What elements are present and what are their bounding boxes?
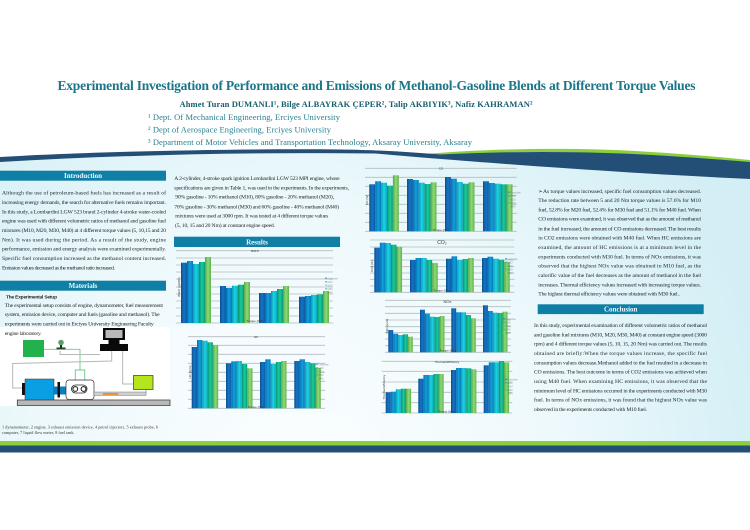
chart: CO: CO: [439, 166, 444, 170]
legend: M40: [508, 391, 513, 395]
text: engine specification: mixtures were used at 3000 rpm. It was tested at 4 different torque values: [175, 213, 329, 220]
legend: M30: [506, 327, 511, 331]
caption: diagram key: [2, 424, 158, 436]
chart: thermal efficiency: Thermal Efficiency: [382, 374, 386, 399]
icon: dynamometer: [22, 379, 66, 400]
text: discussion of results: The reduction rate between 5 and 20 Nm torque values is 57.6% for M10: [538, 197, 701, 204]
text: introduction: In this study, a Lombardini LGW 523 brand 2-cylinder 4-stroke water-cooled: [2, 209, 166, 215]
text: materials: The experimental setup consists of engine, dynamometer, fuel measurement: [5, 302, 163, 309]
legend: M20: [318, 369, 324, 373]
icon: flow meter: [56, 340, 66, 350]
text: engine specification: 70% gasoline - 30% methanol (M30) and 60% gasoline - 40% methanol (M40): [174, 203, 339, 210]
text: introduction: [2, 190, 167, 271]
legend: Gasoline: [508, 257, 518, 261]
legend: M40: [508, 271, 513, 275]
title: Experimental Investigation of Performance and Emissions of Methanol-Gasoline Blends at Different Torque Values: [58, 78, 696, 93]
heading: materials: Materials: [69, 282, 98, 290]
text: materials: experiments were carried out in Erciyes University Engineering Faculty: [5, 322, 154, 328]
heading: introduction: [0, 171, 166, 181]
legend: [505, 257, 518, 275]
legend: M30: [318, 373, 324, 377]
chart: CO: [365, 166, 521, 232]
text: discussion of results: experiments conducted with M30 fuel. In terms of NOx emissions, it was: [538, 253, 702, 260]
legend: M10: [318, 366, 324, 370]
heading: conclusion: [538, 304, 704, 314]
connection lines: [13, 349, 146, 394]
panel: materials: [0, 281, 170, 436]
text: introduction: Nm). It was used during the period. As a result of the study, engine: [2, 236, 166, 243]
affiliations: [148, 112, 473, 147]
text: engine specification: specifications are given in Table 1, was used in the experiments. In the experiments,: [174, 185, 350, 192]
text: introduction: performance, emission and energy analysis were examined experimentally.: [2, 246, 167, 253]
text: conclusion: using M40 fuel. When examining HC emissions, it was observed that the: [534, 378, 707, 385]
chart: NOx: [385, 299, 516, 352]
legend: M10: [508, 381, 513, 385]
chart: CO: Torque (Nm): [433, 228, 449, 232]
icon: test bench: [17, 400, 170, 406]
affiliations: ¹ Dept. Of Mechanical Engineering, Erciyes University: [148, 112, 341, 122]
legend: [503, 317, 516, 335]
chart: NOx: NOx: [444, 299, 452, 304]
text: discussion of results: observed that the highest NOx value was obtained in M10 fuel, as the: [538, 263, 701, 270]
legend: M20: [328, 283, 333, 287]
diagram: experimental setup: [0, 327, 170, 406]
text: materials: system, emission device, computer and fuels (gasoline and methanol). The: [5, 311, 160, 318]
text: engine specification: 90% gasoline - 10% methanol (M10), 80% gasoline - 20% methanol (M20),: [175, 194, 335, 201]
text: introduction: mixtures (M10, M20, M30, M40) at 4 different torque values (5, 10,15 and 20: [2, 227, 166, 234]
icon: computer: [100, 328, 128, 351]
chart: BSFC: [176, 249, 338, 323]
icon: exhaust pipe: [94, 392, 146, 396]
chart: thermal efficiency: [382, 360, 518, 414]
text: introduction: Emission values decreased as the methanol ratio increased.: [2, 265, 116, 271]
legend: M10: [510, 194, 516, 198]
legend: Gasoline: [318, 362, 329, 366]
wave: navy band: [0, 149, 750, 179]
legend: M30: [328, 287, 333, 291]
chart: BSFC: Torque (Nm): [247, 319, 263, 323]
legend: M20: [508, 264, 513, 268]
text: conclusion: obtained are briefly:When the torque values increase, the specific fuel: [534, 350, 707, 357]
legend: M30: [508, 267, 513, 271]
text: conclusion: fuel. In terms of NOx emissions, it was found that the highest NOx value was: [534, 397, 708, 404]
chart: thermal efficiency: Thermal Efficiency: [435, 360, 460, 364]
text: conclusion: consumption values decrease.Methanol added to the fuel resulted in a decrease in: [534, 359, 707, 366]
legend: [325, 276, 338, 294]
chart: CO2: CO2 (%): [370, 260, 374, 272]
text: discussion of results: examined, the amount of HC emissions is at a minimum level in the: [538, 244, 701, 251]
text: engine specification: (5, 10, 15 and 20 Nm) at constant engine speed.: [175, 222, 276, 229]
text: discussion of results: in the fuel increased, the amount of CO emissions decreased. The best results: [538, 225, 702, 232]
chart: CO: CO (%): [365, 195, 369, 205]
icon: fuel tank: [23, 340, 44, 357]
text: engine specification: A 2-cylinder, 4-stroke spark ignition Lombardini LGW 523 MPI engine, whose: [174, 176, 340, 182]
legend: Gasoline: [510, 190, 521, 194]
caption: diagram key: computer, 7 liquid flow meter, 8 fuel tank.: [2, 430, 75, 436]
text: conclusion: observed in the experiments conducted with M10 fuel.: [534, 406, 648, 413]
text: conclusion: and gasoline fuel mixtures (M10, M20, M30, M40) at constant engine speed (3000: [534, 331, 707, 338]
legend: Gasoline: [328, 276, 338, 280]
legend: [508, 190, 521, 208]
panel: introduction: [0, 171, 167, 271]
legend: M40: [510, 204, 516, 208]
text: introduction: Specific fuel consumption increased as the methanol content increased.: [2, 255, 167, 262]
heading: results: Results: [246, 238, 268, 246]
text: conclusion: [534, 322, 708, 413]
heading: materials: [0, 281, 166, 291]
text: conclusion: In this study, experimental examination of different volumetric ratios of methanol: [534, 322, 707, 329]
text: discussion of results: CO emissions were examined, it was observed that as the amount of methanol: [538, 216, 701, 223]
authors: Ahmet Turan DUMANLI¹, Bilge ALBAYRAK ÇEPER², Talip AKBIYIK³, Nafiz KAHRAMAN²: [180, 99, 533, 109]
subheading: experimental setup: The Experimental Setup: [6, 294, 57, 300]
footer band: [0, 441, 750, 452]
legend: M40: [328, 290, 333, 294]
heading: results: [174, 237, 340, 247]
legend: [505, 377, 518, 395]
text: discussion of results: [538, 188, 702, 298]
text: conclusion: CO emissions. The best outcome in terms of CO2 emissions was achieved when: [534, 369, 707, 376]
text: discussion of results: in CO2 emissions were obtained with M40 fuel. When HC emissions are: [538, 235, 701, 242]
heading: introduction: Introduction: [64, 172, 102, 180]
chart: HC: [188, 335, 329, 409]
legend: M40: [318, 376, 324, 380]
legend: M10: [328, 280, 333, 284]
chart: CO2: Torque (Nm): [434, 288, 450, 292]
legend: M10: [506, 320, 511, 324]
legend: M10: [508, 260, 513, 264]
legend: M20: [510, 197, 516, 201]
text: materials: engine laboratory.: [5, 331, 42, 337]
text: introduction: engine was used with different volumetric ratios of methanol and gasoline fuel: [2, 218, 166, 225]
affiliations: ² Dept of Aerospace Engineering, Erciyes University: [148, 124, 332, 134]
legend: Gasoline: [508, 377, 518, 381]
icon: emission device: [134, 376, 153, 390]
text: discussion of results: fuel, 52.8% for M20 fuel, 52.4% for M30 fuel and 51.1% for M40 fuel. When: [538, 206, 701, 213]
legend: M30: [510, 201, 516, 205]
icon: engine: [66, 380, 94, 400]
text: introduction: increasing energy demands, the search for alternative fuels remains important.: [2, 199, 167, 206]
text: materials: [5, 302, 163, 337]
text: introduction: Although the use of petroleum-based fuels has increased as a result of: [2, 190, 166, 196]
chart: CO2: CO₂: [437, 240, 447, 246]
text: conclusion: minimum level of HC emissions occurred in the experiments conducted with M30: [534, 387, 707, 394]
text: discussion of results: The highest thermal efficiency values were obtained with M30 fuel..: [538, 291, 681, 298]
chart: NOx: Torque (Nm): [440, 348, 456, 352]
text: discussion of results: ➢As torque values increased, specific fuel consumption values decreased.: [538, 188, 702, 195]
legend: M30: [508, 388, 513, 392]
text: engine specification: [174, 176, 350, 229]
legend: Gasoline: [506, 317, 516, 321]
text: discussion of results: calorific value of the fuel decreases as the amount of methanol in the fuel: [538, 272, 701, 279]
chart: NOx: NOx (ppm): [385, 319, 389, 333]
chart: CO2: [370, 240, 518, 292]
legend: M40: [506, 331, 511, 335]
legend: [316, 362, 329, 380]
chart: HC: HC: [254, 335, 259, 339]
chart: BSFC: BSFC (g/kWh): [177, 277, 181, 297]
legend: M20: [508, 384, 513, 388]
background panel: [0, 153, 750, 441]
wave: green accent: [425, 149, 750, 164]
legend: M20: [506, 324, 511, 328]
text: conclusion: rpm) and 4 different torque values (5, 10, 15, 20 Nm) was carried out. The results: [534, 341, 708, 348]
chart: HC: HC (ppm): [188, 365, 192, 379]
text: discussion of results: increases. Thermal efficiency values increased with increasing torque values.: [538, 281, 702, 288]
heading: conclusion: Conclusion: [604, 306, 638, 314]
affiliations: ³ Department of Motor Vehicles and Transportation Technology, Aksaray University, Aksaray: [148, 137, 473, 147]
caption: diagram key: 1 dynamometer, 2 engine, 3 exhaust emission device, 4 petrol injectors, 5 exhaust probe, 6: [2, 424, 158, 430]
chart: HC: Torque (Nm): [248, 405, 264, 409]
chart: BSFC: BSFC: [251, 249, 260, 253]
chart: thermal efficiency: Torque (Nm): [438, 410, 455, 414]
